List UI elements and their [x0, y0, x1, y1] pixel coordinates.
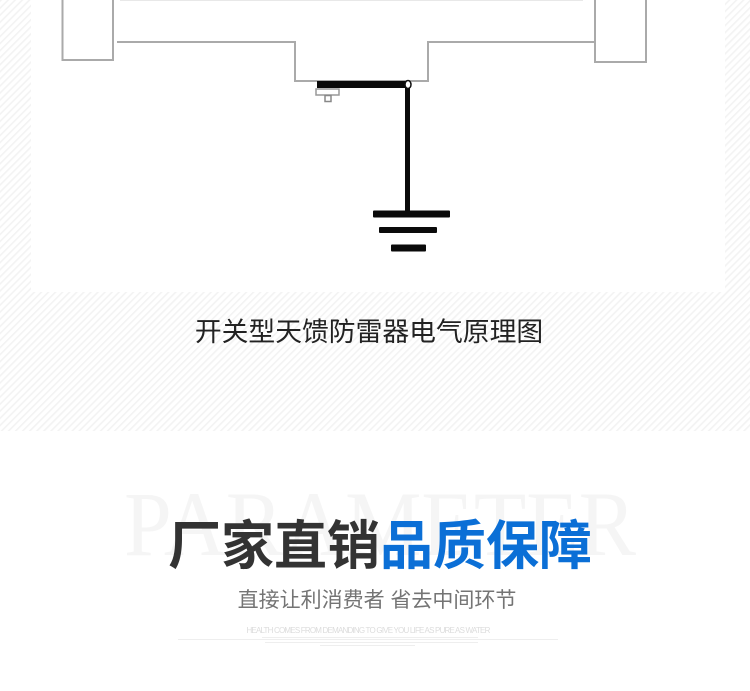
ground symbol — [373, 210, 450, 252]
central arrester body outline — [117, 42, 595, 81]
panel: striped background — [0, 0, 750, 431]
top edge line — [120, 0, 583, 2]
fine print lines — [178, 637, 558, 646]
ground wire — [405, 84, 410, 214]
left connector housing — [62, 0, 113, 60]
panel: white diagram card — [31, 0, 725, 292]
heading: 厂家直销品质保障 — [168, 517, 592, 576]
switch terminal — [316, 89, 339, 102]
black switch bar — [317, 81, 407, 88]
junction node — [405, 80, 411, 88]
subheading: 直接让利消费者 省去中间环节 — [238, 589, 516, 612]
chart: lightning arrester electrical schematic — [62, 0, 647, 252]
caption: 开关型天馈防雷器电气原理图 — [195, 317, 543, 347]
english tagline: HEALTH COMES FROM DEMANDING TO GIVE YOU LIFE AS PURE AS WATER — [246, 626, 490, 635]
right connector housing — [595, 0, 646, 62]
